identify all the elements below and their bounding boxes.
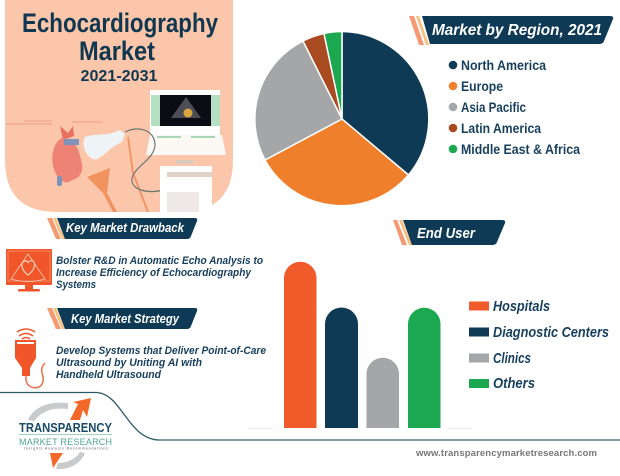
slice: Europe bbox=[265, 119, 408, 206]
panel: title background bbox=[5, 0, 233, 212]
icon: ultrasound probe and cord bbox=[83, 129, 163, 192]
slice: North America bbox=[342, 32, 429, 175]
legend: regions: Europe bbox=[461, 78, 503, 94]
text: strategy description: Handheld Ultrasound bbox=[56, 369, 161, 381]
legend: regions bbox=[449, 57, 580, 157]
bar: Hospitals bbox=[284, 262, 316, 428]
title: Market bbox=[79, 36, 155, 66]
bar: Clinics bbox=[366, 358, 399, 428]
legend: regions: North America bbox=[461, 57, 546, 73]
heading: Key Market Strategy bbox=[47, 308, 197, 329]
text: strategy description: Ultrasound by Uniting AI with bbox=[56, 357, 202, 369]
logo: Transparency Market Research bbox=[19, 398, 113, 469]
legend: regions: Asia Pacific bbox=[461, 99, 526, 115]
icon: heart bbox=[52, 126, 82, 186]
bar chart: end user bbox=[248, 262, 472, 428]
logo: Transparency Market Research: MARKET RESEARCH bbox=[19, 437, 112, 447]
heading: Key Market Drawback: Key Market Drawback bbox=[66, 221, 185, 235]
title bbox=[22, 8, 218, 85]
icon: handheld ultrasound probe bbox=[15, 329, 45, 388]
text: drawback description bbox=[56, 255, 263, 291]
slice: Middle East and Africa bbox=[324, 32, 342, 119]
legend: regions: Middle East & Africa bbox=[461, 141, 580, 157]
pie chart: market by region bbox=[255, 32, 429, 206]
logo: Transparency Market Research: TRANSPARENCY bbox=[19, 421, 113, 435]
illustration: heart ultrasound scene bbox=[6, 90, 226, 212]
heading: Key Market Strategy: Key Market Strategy bbox=[71, 312, 180, 326]
icon: monitor with heart scan bbox=[6, 249, 52, 292]
heading: End User bbox=[393, 220, 505, 245]
website url: www.transparencymarketresearch.com bbox=[415, 448, 597, 459]
icon: ultrasound machine bbox=[146, 90, 226, 164]
text: drawback description: Bolster R&D in Automatic Echo Analysis to bbox=[56, 255, 263, 267]
legend: regions: Latin America bbox=[461, 120, 541, 136]
heading: Market by Region bbox=[409, 16, 613, 45]
body vessels bbox=[87, 168, 117, 212]
text: drawback description: Increase Efficiency of Echocardiography bbox=[56, 267, 252, 279]
footer line bbox=[0, 392, 160, 440]
slice: Asia Pacific bbox=[255, 41, 342, 160]
legend: end users: Others bbox=[493, 375, 535, 392]
text: drawback description: Systems bbox=[56, 279, 96, 291]
legend: end users bbox=[469, 298, 609, 392]
slice: Latin America bbox=[303, 34, 342, 119]
bar: Diagnostic Centers bbox=[325, 308, 358, 428]
heading: End User: End User bbox=[417, 225, 476, 242]
logo: Transparency Market Research: Insights Analysis Recommendations bbox=[24, 446, 108, 450]
title: Echocardiography bbox=[22, 8, 218, 38]
title: 2021-2031 bbox=[80, 68, 158, 85]
heading: Key Market Drawback bbox=[47, 218, 197, 239]
heading: Market by Region: Market by Region, 2021 bbox=[432, 22, 602, 39]
text: strategy description: Develop Systems that Deliver Point-of-Care bbox=[56, 345, 266, 357]
bar: Others bbox=[408, 308, 440, 428]
legend: end users: Hospitals bbox=[493, 298, 550, 315]
text: strategy description bbox=[56, 345, 266, 381]
icon: printer cart bbox=[160, 166, 212, 212]
legend: end users: Clinics bbox=[493, 350, 531, 367]
